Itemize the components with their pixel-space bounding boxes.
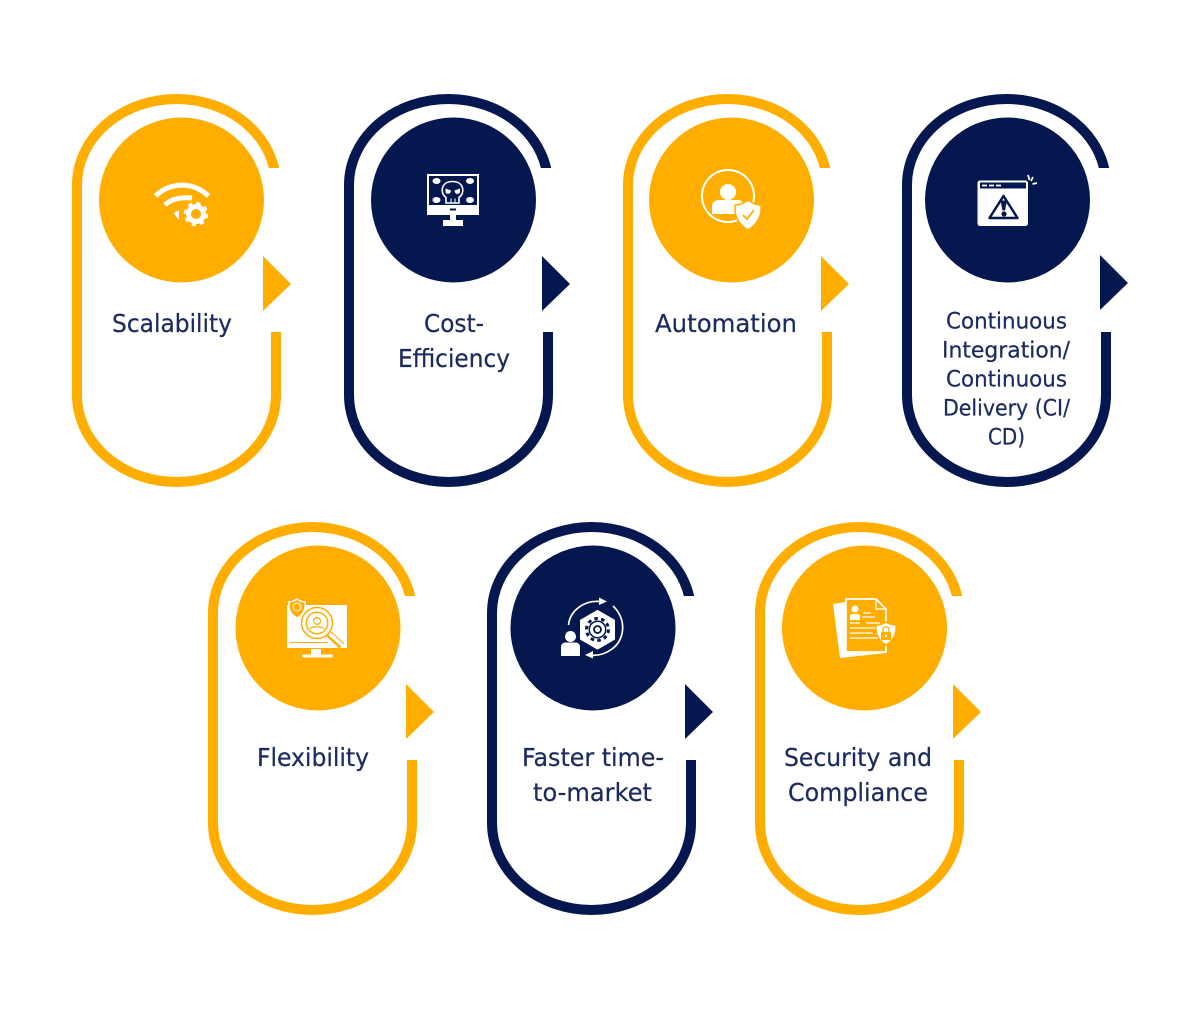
label: to-market <box>533 778 652 807</box>
icon: monitor skull <box>427 174 479 226</box>
card: Scalability <box>77 99 291 482</box>
label: Continuous <box>946 310 1067 334</box>
icon: browser warning <box>978 175 1037 226</box>
label: Cost- <box>424 309 484 338</box>
arrow <box>685 684 713 739</box>
label: Faster time- <box>522 743 664 772</box>
card: Automation <box>628 99 849 482</box>
card outline <box>349 99 564 482</box>
card: CI/CD <box>907 99 1128 482</box>
label <box>522 743 664 807</box>
arrow <box>406 684 434 739</box>
icon: wifi gear <box>156 185 208 224</box>
card: Faster time-to-market <box>492 527 713 910</box>
label: Efficiency <box>398 344 510 373</box>
card outline <box>760 527 975 910</box>
circle badge <box>99 118 264 282</box>
label: Scalability <box>112 309 232 338</box>
arrow <box>953 684 981 739</box>
circle badge <box>236 546 400 710</box>
label: Compliance <box>788 778 928 807</box>
label: Continuous <box>946 368 1067 392</box>
arrow <box>542 256 570 311</box>
icon: monitor magnifier <box>287 599 347 658</box>
arrow <box>1100 255 1128 310</box>
label: Flexibility <box>257 743 369 772</box>
arrow <box>821 256 849 311</box>
circle badge <box>782 546 947 710</box>
label: CD) <box>988 426 1025 450</box>
label: Security and <box>784 743 932 772</box>
label <box>942 310 1071 450</box>
card outline <box>628 99 843 482</box>
label: Automation <box>655 309 797 338</box>
card: Flexibility <box>213 527 434 910</box>
card outline <box>492 527 707 910</box>
label <box>398 309 510 373</box>
card: Cost-Efficiency <box>349 99 570 482</box>
icon: cycle gear person <box>561 598 623 658</box>
label: Integration/ <box>942 338 1071 364</box>
circle badge <box>510 546 676 710</box>
circle badge <box>925 118 1090 282</box>
circle badge <box>371 118 536 282</box>
label <box>784 743 932 807</box>
card: Security and Compliance <box>760 527 981 910</box>
card outline <box>77 99 290 482</box>
arrow <box>263 256 291 311</box>
card outline <box>213 527 428 910</box>
card outline <box>907 99 1122 482</box>
icon: document lock <box>833 599 896 658</box>
circle badge <box>649 118 814 282</box>
icon: user shield <box>702 170 761 230</box>
label: Delivery (CI/ <box>943 396 1071 422</box>
